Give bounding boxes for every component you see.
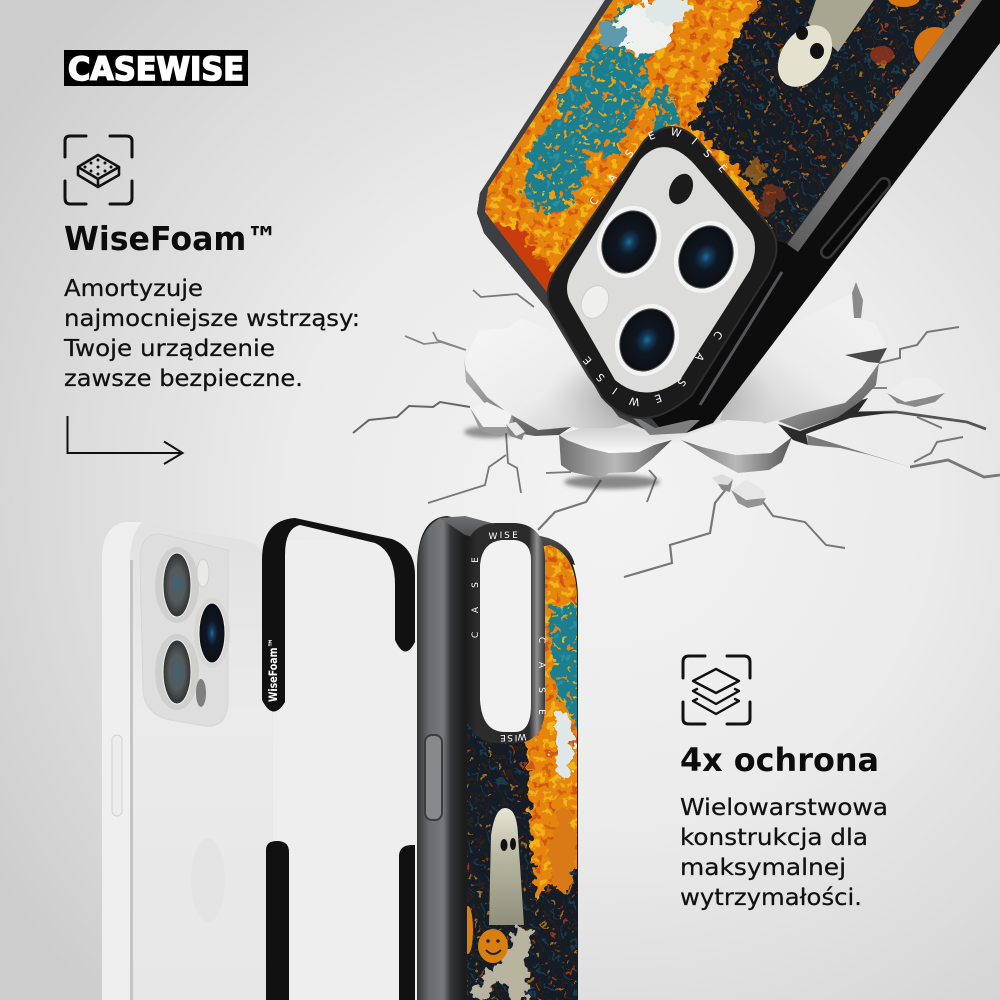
ghost (489, 808, 524, 925)
printed artwork (485, 0, 967, 292)
bottom gloss (625, 410, 700, 435)
side button (112, 735, 122, 816)
lens middle (194, 598, 230, 668)
ring lettering: S (471, 582, 481, 588)
ring lettering: E (653, 391, 663, 405)
WiseFoam strip bottom right (399, 845, 415, 1000)
center-left chunk (559, 435, 672, 478)
lower gloss line (700, 272, 782, 405)
impact shadow (545, 345, 775, 445)
ring lettering: S (594, 370, 607, 384)
apple logo ghost (191, 838, 225, 922)
ring lettering: C (710, 328, 724, 341)
white driftwood (467, 925, 532, 1000)
glossy side band (787, 0, 982, 252)
ghost (778, 0, 874, 87)
translucent left rim (477, 0, 660, 433)
ring lettering: S (674, 376, 688, 389)
cracked wall (353, 282, 1000, 577)
text block: protection description: Wielowarstwowa (680, 793, 888, 821)
ring lettering: I (515, 732, 517, 742)
icon: foam pad in focus brackets (65, 136, 132, 204)
arrow (68, 416, 182, 464)
microphone (196, 679, 206, 707)
text block: WiseFoam description (63, 274, 360, 392)
text block: WiseFoam description: Amortyzuje (64, 274, 203, 302)
ring lettering: W (628, 394, 641, 408)
ring lettering: C (536, 637, 546, 643)
ring lettering: I (611, 385, 620, 396)
printed artwork (467, 545, 577, 1000)
ring lettering: A (692, 350, 706, 364)
ring lettering: E (500, 732, 506, 742)
ring lettering: A (471, 606, 481, 613)
camera ring (548, 127, 776, 418)
side button (827, 184, 884, 252)
text block: protection description: konstrukcja dla (680, 823, 868, 851)
text block: protection description: wytrzymałości. (680, 883, 862, 911)
ring lettering: I (500, 531, 502, 541)
ring lettering: E (716, 163, 729, 175)
top phone with case (460, 0, 1000, 435)
ring lettering: S (507, 732, 513, 742)
heading: WiseFoam: WiseFoam™ (64, 219, 278, 258)
text block: WiseFoam description: najmocniejsze wstrząsy: (64, 304, 360, 332)
right pebble (887, 376, 945, 402)
ring lettering: E (471, 557, 481, 563)
side button (425, 735, 442, 820)
case body (477, 0, 1000, 433)
small left chunks (470, 402, 512, 427)
flash (576, 281, 614, 323)
ring lettering: W (489, 532, 498, 542)
foam backing area (273, 540, 417, 1000)
text block: WiseFoam description: zawsze bezpieczne. (64, 364, 303, 392)
ring lettering: S (504, 531, 510, 541)
ring lettering: C (471, 632, 481, 638)
camera plateau (140, 534, 228, 726)
ring lettering: E (536, 709, 546, 715)
flash (197, 559, 209, 587)
crack lines (353, 290, 1000, 577)
sensor (664, 170, 698, 208)
phone body (102, 522, 273, 1000)
lens top (155, 547, 199, 623)
logo: CASEWISE (68, 50, 244, 88)
small bottom chunks (712, 474, 733, 485)
lens 2 (662, 210, 750, 304)
dark crack wedge (778, 398, 897, 445)
ring lettering: C (587, 195, 602, 208)
heading: 4x ochrona: 4x ochrona (680, 741, 879, 779)
WiseFoam strip top (262, 518, 415, 712)
icon: layers in focus brackets (683, 656, 750, 724)
ring lettering (581, 126, 729, 408)
pumpkin (478, 929, 508, 963)
ring lettering: W (669, 126, 683, 140)
white phone (102, 522, 273, 1000)
top bar (440, 516, 575, 565)
right large chunk (720, 293, 887, 425)
ring lettering: I (689, 136, 699, 147)
text block: protection description (680, 793, 888, 911)
side band (417, 518, 465, 1000)
ring lettering: E (512, 531, 518, 541)
text block: WiseFoam description: Twoje urządzenie (63, 334, 275, 362)
text block: protection description: maksymalnej (680, 853, 846, 881)
lens bottom (155, 634, 199, 710)
ring lettering: A (606, 171, 620, 185)
ring lettering: S (701, 147, 714, 161)
camera window (480, 540, 531, 732)
lens 3 (603, 293, 691, 387)
left large chunk (466, 318, 640, 432)
pumpkins (914, 27, 945, 63)
ring lettering: S (536, 687, 546, 693)
ring lettering: S (623, 147, 637, 160)
phone side band (102, 522, 142, 1000)
center-right chunk (681, 437, 792, 473)
camera ring (465, 523, 545, 743)
side phone with case (417, 516, 585, 1000)
ring lettering: W (517, 731, 526, 741)
case frame (417, 516, 578, 1000)
ring lettering: E (581, 354, 594, 366)
camera window (567, 147, 755, 392)
WiseFoam strip bottom left (266, 841, 289, 1000)
ring lettering: A (536, 662, 546, 669)
strip label: WiseFoam™ (266, 638, 280, 702)
lens 1 (585, 195, 673, 289)
ring lettering (471, 531, 546, 742)
ring lettering: E (647, 129, 657, 143)
